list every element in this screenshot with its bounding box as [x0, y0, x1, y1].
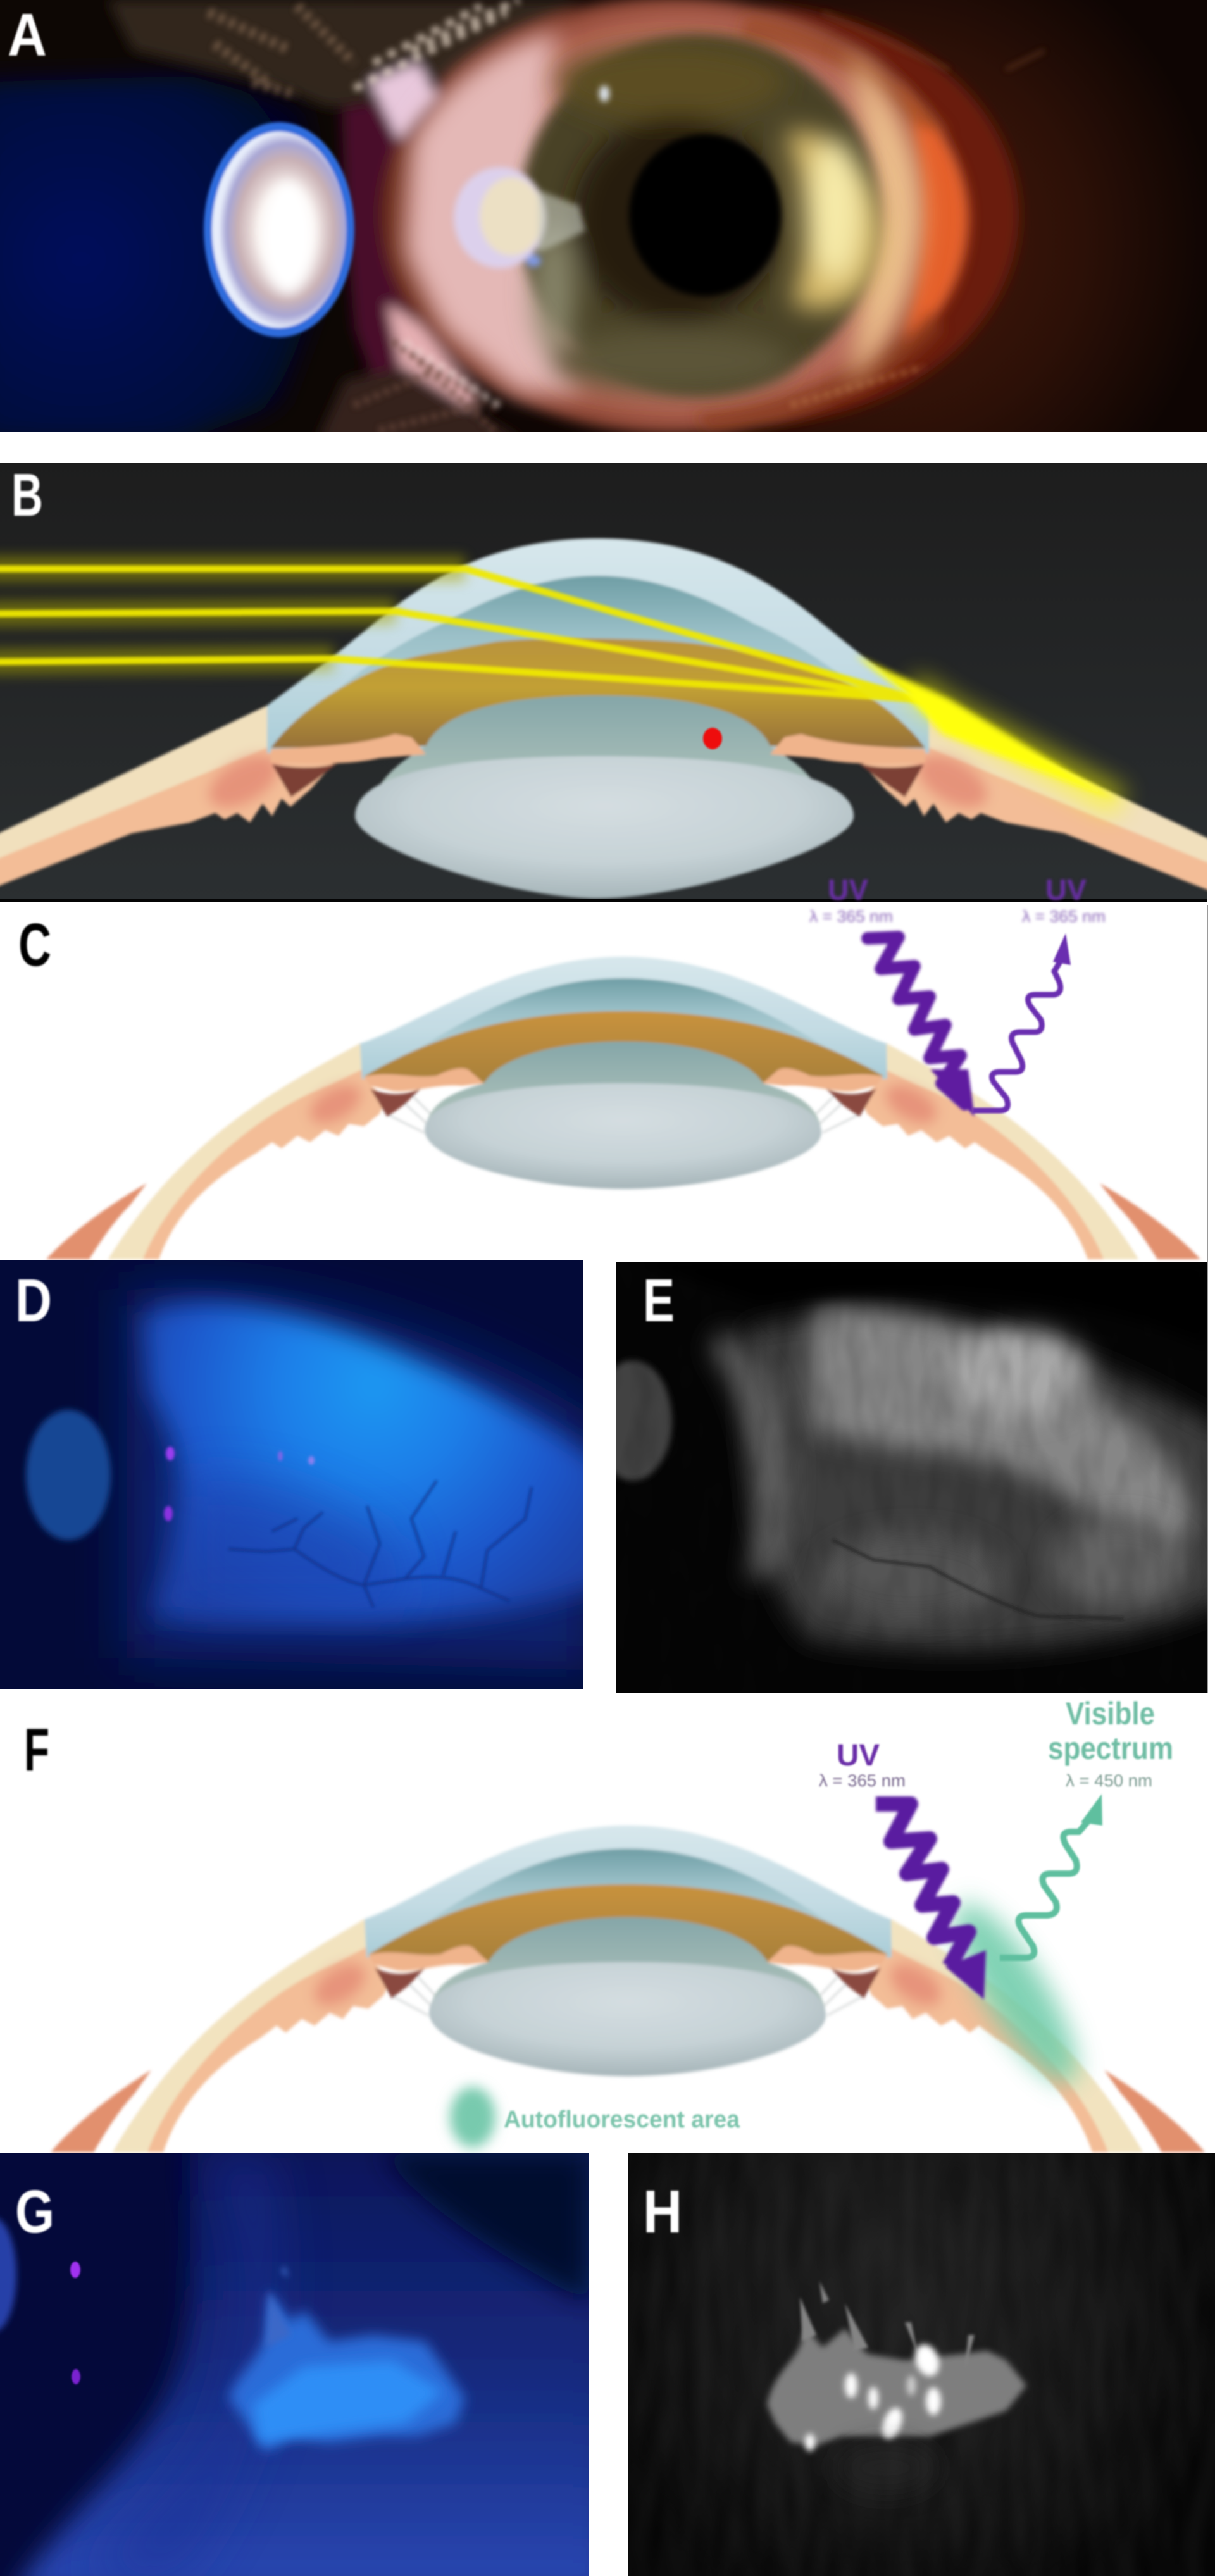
iris	[519, 35, 880, 395]
ciliary right	[763, 1068, 883, 1092]
label B: B	[11, 461, 43, 529]
UV label left: UV	[828, 873, 868, 906]
yellow rays glow	[0, 569, 465, 662]
blood vessels	[228, 1481, 532, 1607]
label G: G	[15, 2178, 54, 2246]
visible spectrum label F	[1048, 1696, 1173, 1790]
sclera	[380, 0, 962, 433]
label A: A	[8, 1, 47, 69]
UV label F: UV	[837, 1739, 880, 1772]
lower bright zones	[816, 1531, 1006, 1620]
label H: H	[643, 2178, 682, 2246]
blue sclera band	[13, 2139, 608, 2576]
cornea	[360, 957, 887, 1079]
label E: E	[643, 1267, 675, 1335]
panel A: eye photograph with scleral lens	[0, 0, 1207, 443]
UV reflected arrow C	[973, 933, 1071, 1111]
purple markers	[70, 2262, 80, 2384]
right edge line	[1207, 905, 1208, 1693]
anterior chamber	[380, 978, 867, 1073]
panel G: blue photograph with fluorescent lesion	[0, 2139, 608, 2576]
visible spectrum label F: Visible	[1066, 1696, 1155, 1731]
cornea	[267, 538, 929, 753]
label D: D	[15, 1267, 52, 1335]
dark blue background left	[0, 0, 354, 432]
dark red outer band	[763, 0, 1025, 429]
dark wrinkles top right	[380, 2153, 589, 2303]
sclera right	[863, 706, 1215, 895]
label F: F	[24, 1716, 49, 1784]
visible emission arrow F	[1000, 1794, 1102, 1958]
anatomy B	[0, 538, 1215, 899]
concentrated yellow beam	[854, 655, 1117, 800]
lower lid	[316, 367, 525, 443]
sclera right	[861, 1043, 1138, 1259]
panel B: dark cross-section with yellow light rays	[0, 463, 1215, 904]
pupil	[629, 134, 781, 296]
lens cortex	[355, 756, 854, 899]
lesion streaks	[800, 2281, 975, 2370]
panel H: greyscale lesion autofluorescence	[628, 2153, 1215, 2576]
upper lid	[108, 0, 582, 108]
lens nucleus	[370, 695, 826, 813]
anatomy C	[46, 957, 1200, 1259]
panel F: cross-section with autofluorescent area	[51, 1696, 1205, 2152]
outer blue halo	[127, 1287, 595, 1671]
panel E: greyscale autofluorescence image	[594, 1262, 1215, 1693]
visible spectrum label F: spectrum	[1048, 1731, 1173, 1766]
zonule fibres	[386, 1095, 861, 1133]
UV label right: UV	[1045, 873, 1087, 906]
dim halo below lesion	[835, 2442, 937, 2493]
lighter limbal band	[82, 2158, 278, 2576]
legend: autofluorescent area: Autofluorescent area	[504, 2106, 740, 2133]
UV label F: λ = 365 nm	[819, 1771, 906, 1790]
ciliary left	[364, 1068, 484, 1092]
cornea edge	[594, 1360, 672, 1481]
UV label left: λ = 365 nm	[809, 907, 893, 926]
bright blue conjunctiva	[142, 1303, 608, 1624]
bright spots	[805, 2341, 944, 2451]
pale nasal sclera	[405, 32, 582, 392]
ciliary bodies	[271, 734, 426, 764]
lesion body	[767, 2329, 1026, 2446]
visible spectrum label F: λ = 450 nm	[1066, 1771, 1152, 1790]
legend: autofluorescent area	[450, 2087, 740, 2148]
vessels	[833, 1540, 1123, 1619]
muscle right	[1100, 1183, 1200, 1259]
muscle left	[46, 1183, 147, 1259]
sclera left	[0, 706, 333, 895]
UV label right	[1022, 873, 1106, 926]
UV incident arrow F	[876, 1804, 986, 2000]
lens held on blue background	[204, 122, 354, 337]
iris	[364, 1011, 884, 1083]
top dark shadow	[639, 1262, 1207, 1348]
eyelashes	[209, 0, 1044, 430]
maroon canthus	[342, 95, 411, 399]
cornea oval	[26, 1410, 111, 1540]
panel D: blue UV photograph	[0, 1260, 608, 1689]
limbal arc	[709, 1329, 792, 1582]
UV label left	[809, 873, 893, 926]
yellow light rays	[0, 569, 938, 706]
red focal dot	[703, 728, 722, 749]
UV incident arrow C	[868, 937, 975, 1117]
anterior chamber	[278, 576, 918, 747]
reflected lens on the eye	[454, 85, 609, 268]
mid-grey sclera	[745, 1316, 1215, 1650]
mottled texture	[616, 1262, 1207, 1693]
green fluorescence glow	[935, 1889, 1097, 2098]
orange limbal glow	[899, 82, 969, 348]
darker lower conjunctiva	[184, 1479, 405, 1607]
UV label right: λ = 365 nm	[1022, 907, 1106, 926]
cornea edge	[0, 2218, 16, 2332]
limbal cream band	[848, 51, 921, 386]
sclera left	[108, 1043, 386, 1259]
UV label F	[819, 1739, 906, 1790]
bright scleral zone	[809, 1307, 1190, 1551]
panel C: cross-section with UV reflection	[46, 873, 1200, 1259]
anatomy F	[51, 1826, 1205, 2152]
label C: C	[18, 911, 51, 979]
iris	[271, 638, 925, 748]
lens cortex	[425, 1083, 821, 1189]
purple markers	[164, 1447, 315, 1521]
lens nucleus	[425, 1042, 821, 1133]
fluorescent lesion	[228, 2291, 465, 2452]
